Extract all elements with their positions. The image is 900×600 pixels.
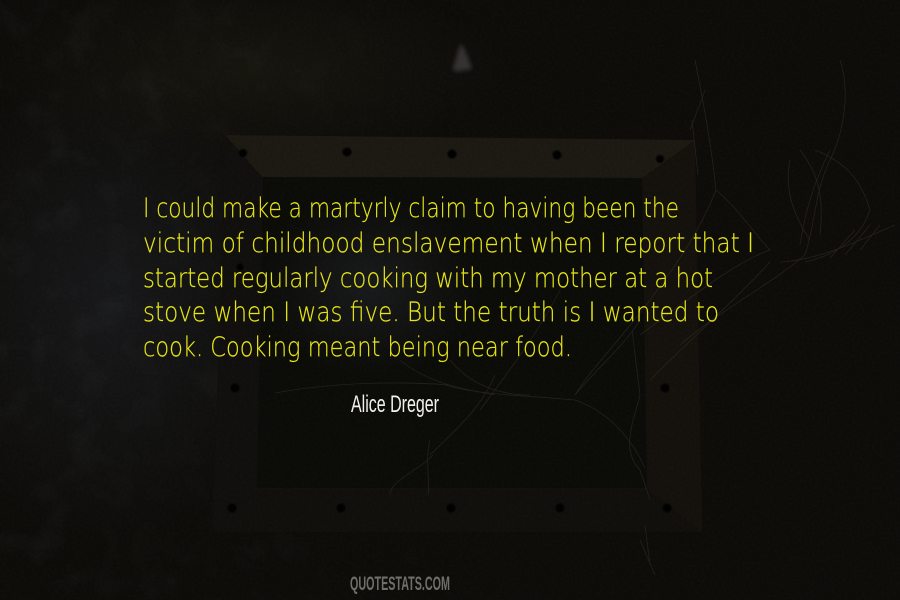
author name: Alice Dreger [351,391,439,418]
quote line 3: started regularly cooking with my mother at a hot [143,263,713,294]
quote line 5: cook. Cooking meant being near food. [143,332,572,363]
wooden frame [213,135,702,532]
quote line 1: I could make a martyrly claim to having been the [143,193,679,224]
frame rivets [228,148,672,512]
icon: pale moth at top [453,44,472,71]
background wall [0,41,324,474]
frame window [257,177,647,488]
quote line 2: victim of childhood enslavement when I report that I [143,228,754,259]
dried plant branches [275,60,895,575]
quote text [143,193,754,363]
quote line 4: stove when I was five. But the truth is I wanted to [143,297,719,328]
watermark: QUOTESTATS.COM [350,574,450,595]
